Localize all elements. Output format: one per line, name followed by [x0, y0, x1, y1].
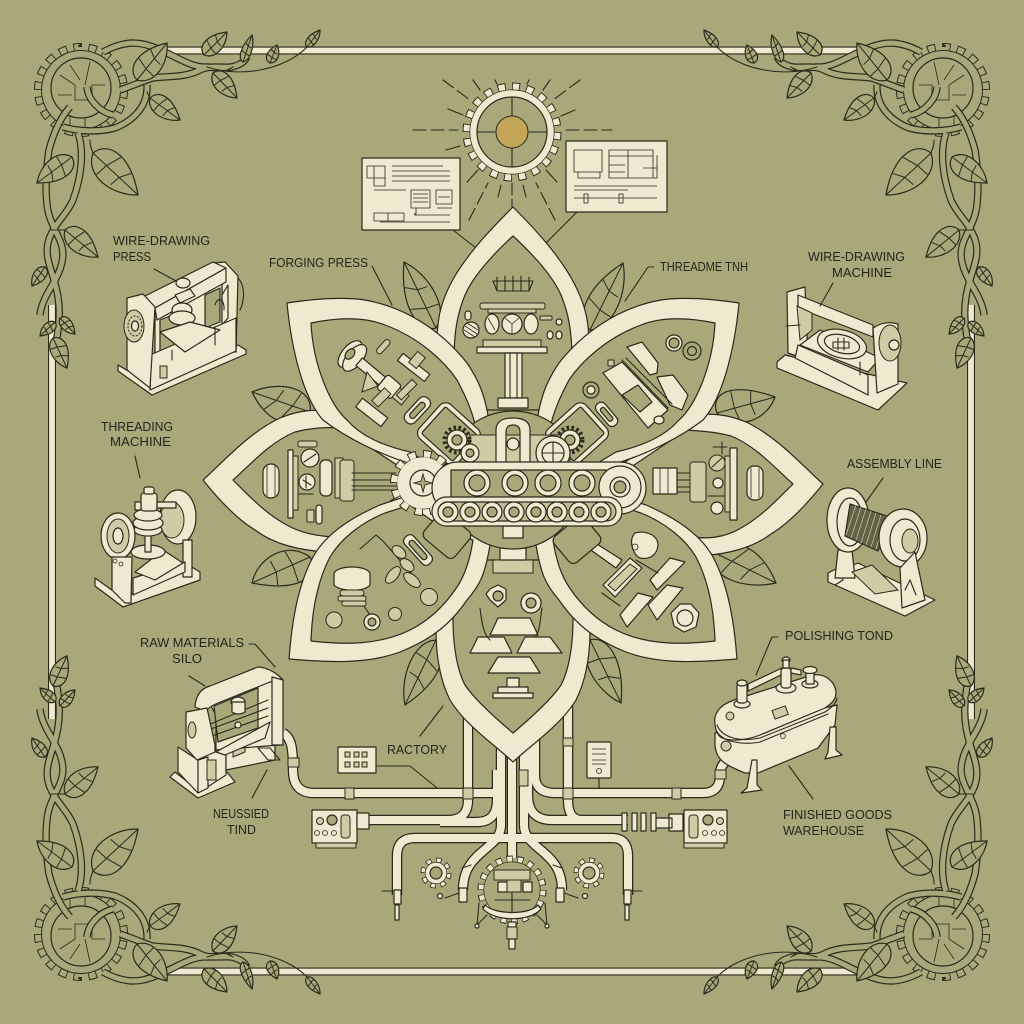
label: threading machine: MACHINE	[110, 434, 171, 449]
label: neussied tind: NEUSSIED	[213, 806, 269, 821]
control box left	[312, 810, 369, 848]
blueprint card: right	[544, 141, 667, 245]
right petal parts	[653, 442, 763, 520]
bottom petal ingots	[470, 548, 562, 698]
label: wire-drawing press	[113, 233, 210, 281]
panel: lower right petal	[536, 495, 737, 662]
lower right petal parts	[567, 528, 699, 632]
panel: upper right petal	[536, 298, 739, 475]
corner ornament: top right	[701, 26, 997, 371]
label: ractory	[387, 706, 447, 757]
small gear left	[423, 860, 449, 886]
upper conveyor belt	[432, 462, 646, 514]
label: wire-drawing press: WIRE-DRAWING	[113, 233, 210, 248]
label: assembly line	[847, 456, 942, 502]
corner ornament: bottom right	[701, 653, 997, 998]
panel: bottom petal	[436, 548, 590, 762]
label: neussied tind	[213, 770, 269, 837]
label: wire-drawing machine	[808, 249, 905, 306]
label: neussied tind: TIND	[227, 822, 256, 837]
top petal parts	[463, 276, 562, 408]
label: ractory: RACTORY	[387, 742, 447, 757]
control panel right	[587, 742, 611, 788]
upper left petal parts	[334, 337, 433, 427]
label: raw materials silo	[140, 635, 275, 686]
corner ornament: top left	[27, 26, 323, 371]
left petal parts	[263, 441, 398, 524]
label: raw materials silo: RAW MATERIALS	[140, 635, 244, 650]
label: wire-drawing press: PRESS	[113, 249, 151, 264]
label: assembly line: ASSEMBLY LINE	[847, 456, 942, 471]
machine: assembly line winch	[827, 488, 935, 616]
machine: polishing tank	[715, 657, 842, 793]
machine: wire-drawing machine	[777, 287, 907, 410]
pipe ends left	[382, 890, 401, 920]
control box right with rings	[622, 810, 727, 848]
machine: wire-drawing press	[118, 262, 246, 395]
label: forging press	[269, 255, 392, 305]
panel: lower left petal	[289, 495, 490, 662]
blueprint card: left	[362, 158, 476, 248]
panel: upper left petal	[287, 298, 490, 475]
label: threadme tnh	[625, 259, 748, 301]
arch	[496, 418, 530, 465]
panel: left petal	[203, 410, 420, 552]
label: forging press: FORGING PRESS	[269, 255, 368, 270]
machine: threading machine	[95, 487, 200, 607]
control panel left	[338, 747, 437, 788]
label: raw materials silo: SILO	[172, 651, 202, 666]
gears on the hub	[445, 428, 582, 470]
sun gear with rays	[413, 80, 612, 220]
upper right petal parts	[583, 335, 701, 429]
panel: right petal	[606, 414, 823, 556]
label: polishing tond	[756, 628, 893, 675]
pipe network	[283, 700, 732, 895]
label: wire-drawing machine: MACHINE	[832, 265, 892, 280]
label: finished goods warehouse	[783, 766, 892, 838]
lower left petal parts	[326, 533, 438, 630]
central lower gear control unit	[438, 859, 588, 949]
left conveyor gear	[394, 454, 452, 512]
label: threading machine: THREADING	[101, 419, 173, 434]
label: threading machine	[101, 419, 173, 478]
label: finished goods warehouse: FINISHED GOODS	[783, 807, 892, 822]
label: wire-drawing machine: WIRE-DRAWING	[808, 249, 905, 264]
corner ornament: bottom left	[27, 653, 323, 998]
panel: top petal	[437, 207, 589, 410]
label: polishing tond: POLISHING TOND	[785, 628, 893, 643]
small gear right	[576, 860, 602, 886]
leaves between petals	[242, 256, 788, 712]
label: threadme tnh: THREADME TNH	[660, 259, 748, 274]
pipe ends right	[624, 890, 642, 920]
phones behind the conveyor	[414, 400, 612, 566]
label: finished goods warehouse: WAREHOUSE	[783, 823, 864, 838]
central hub with conveyor	[394, 400, 646, 566]
lower conveyor belt	[432, 497, 622, 526]
machine: raw materials silo	[170, 667, 283, 798]
